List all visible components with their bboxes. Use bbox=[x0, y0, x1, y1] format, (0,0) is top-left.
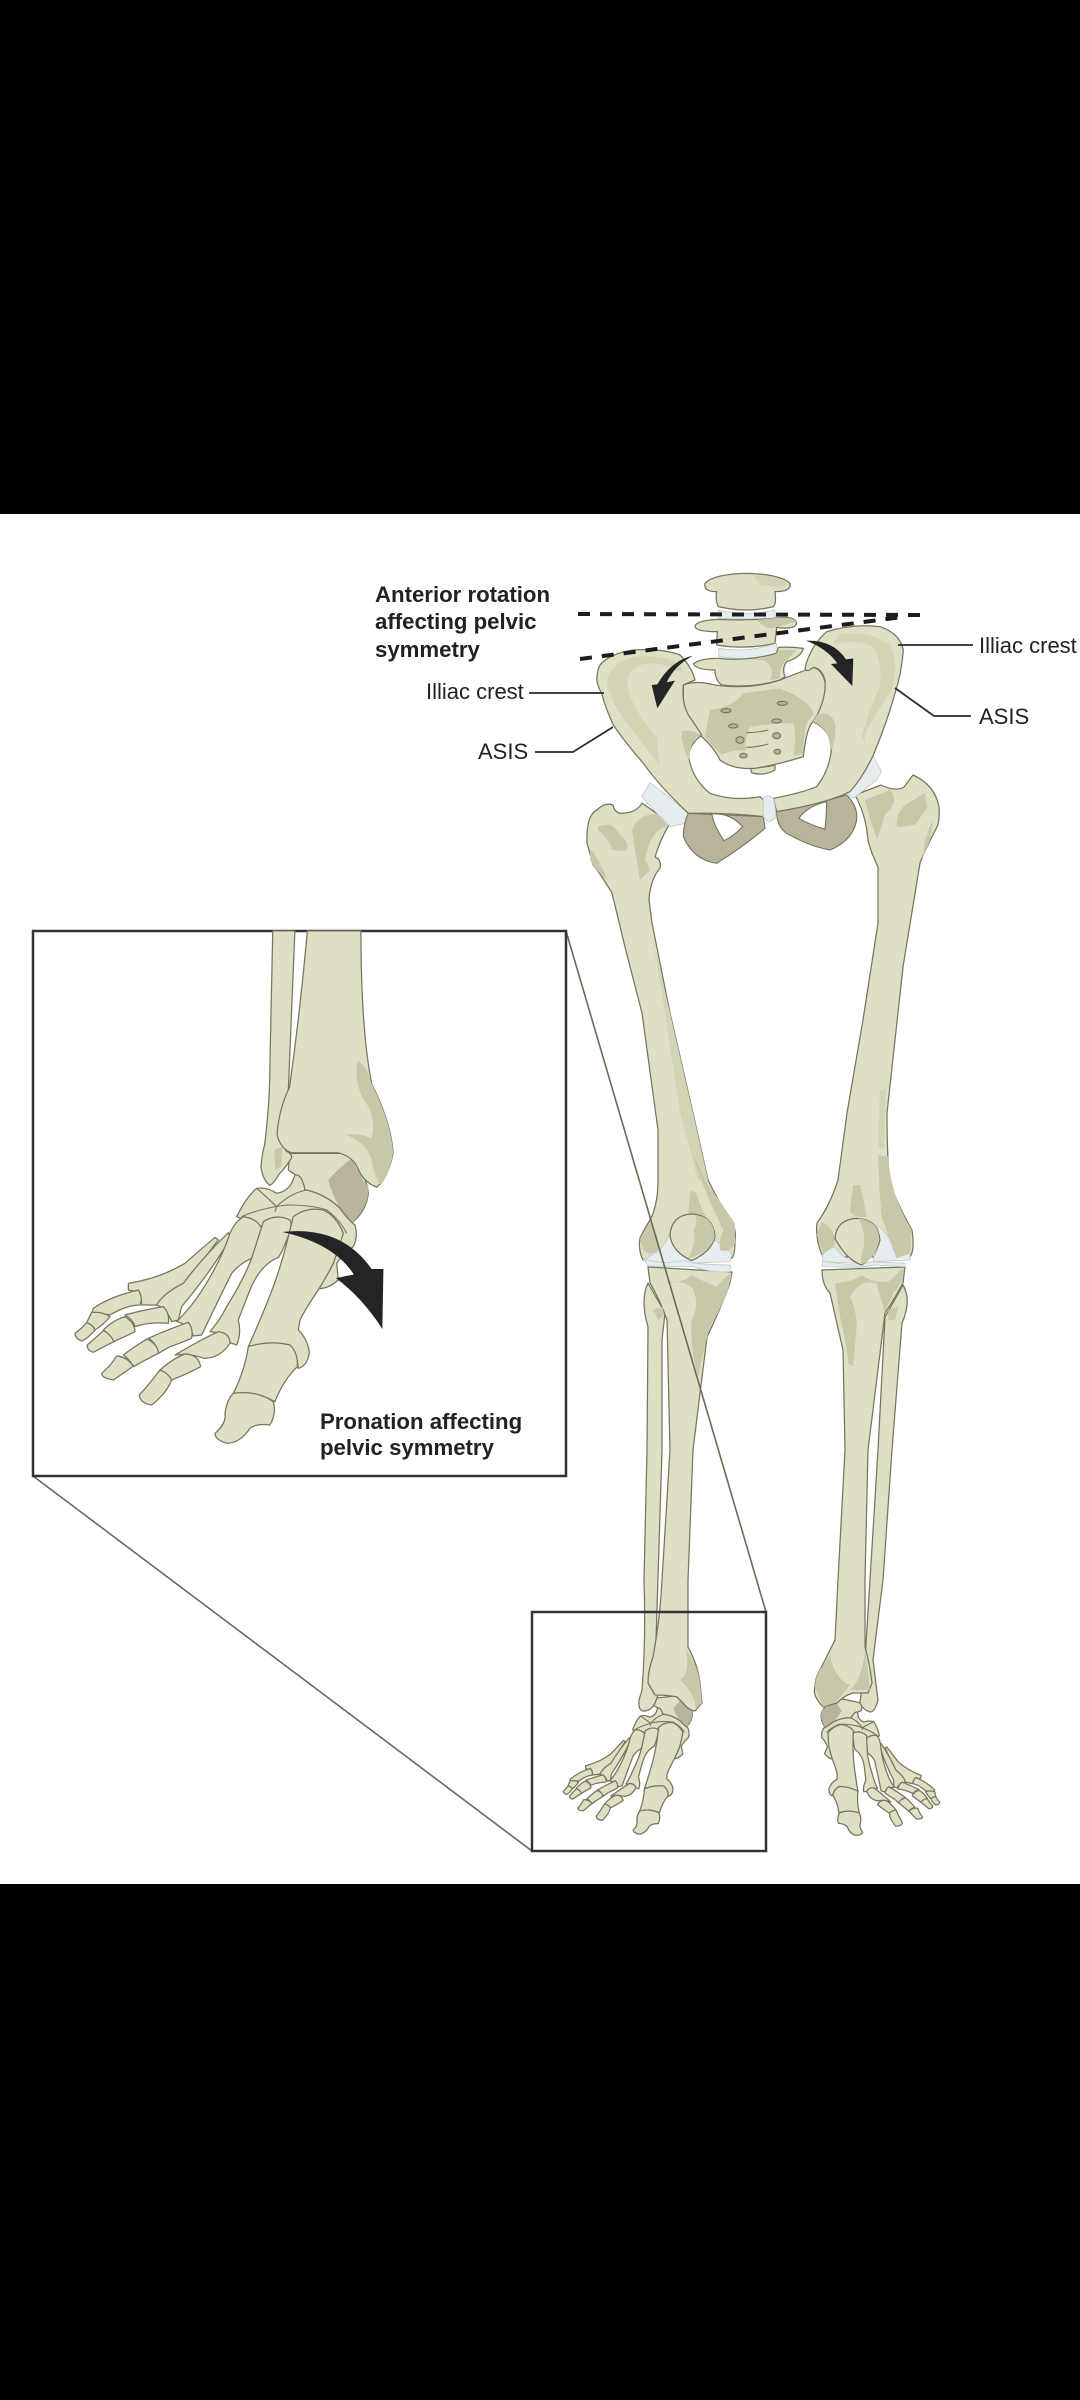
left foot bbox=[554, 1694, 705, 1842]
L4 vertebra bbox=[695, 617, 797, 647]
lower pubic bone right bbox=[777, 795, 857, 850]
label: illiac crest left: Illiac crest bbox=[426, 679, 524, 704]
lower pubic bone left bbox=[683, 813, 765, 863]
left iliac fossa shadow bbox=[682, 731, 700, 760]
inset tibia shading bbox=[345, 1062, 393, 1185]
label: illiac crest right: Illiac crest bbox=[979, 633, 1077, 658]
left tibia bbox=[648, 1267, 732, 1711]
left patella shade bbox=[688, 1215, 715, 1258]
leader lines bbox=[529, 645, 973, 752]
right femur condyle shade bbox=[817, 1155, 912, 1258]
label: ASIS right: ASIS bbox=[979, 704, 1029, 729]
lower disc bbox=[718, 643, 777, 659]
inset frame bbox=[33, 931, 566, 1476]
right foot bbox=[790, 1696, 962, 1850]
sacrum ridge lines bbox=[747, 730, 768, 747]
inset caption: pelvic symmetry bbox=[320, 1435, 495, 1460]
right ilium shading bbox=[833, 633, 895, 747]
right patella shade bbox=[858, 1218, 879, 1264]
L5 vertebra bbox=[693, 647, 803, 686]
small selection box around foot bbox=[532, 1612, 766, 1851]
left knee cartilage bbox=[643, 1235, 732, 1265]
coccyx bbox=[750, 765, 775, 774]
right patella bbox=[835, 1218, 880, 1265]
L3 vertebra bbox=[705, 573, 790, 610]
top black band bbox=[0, 0, 1080, 514]
left ilium shading bbox=[607, 656, 683, 767]
left femur bbox=[587, 803, 735, 1260]
L3 shading bbox=[753, 575, 788, 587]
inset foot bones bbox=[75, 1153, 368, 1443]
obturator foramen right bbox=[799, 802, 827, 829]
public symphysis bbox=[763, 796, 776, 821]
right ankle shading bbox=[815, 1650, 870, 1707]
femoral head cartilage left bbox=[642, 783, 688, 827]
dashed reference lines bbox=[578, 614, 923, 659]
left meniscus bbox=[643, 1258, 731, 1272]
obturator foramen left bbox=[712, 814, 743, 841]
right knee cartilage bbox=[822, 1225, 910, 1263]
right fibula bbox=[860, 1285, 907, 1712]
left femur head shading bbox=[590, 814, 668, 880]
femoral head cartilage right bbox=[847, 757, 882, 798]
L4 shading bbox=[757, 618, 796, 628]
inset panel: foot pronation bbox=[33, 931, 566, 1476]
heading: anterior rotation: affecting pelvic bbox=[375, 609, 537, 634]
white canvas bbox=[0, 514, 1080, 1884]
screen-right leg bones bbox=[790, 775, 962, 1850]
left patella bbox=[670, 1214, 715, 1261]
right meniscus bbox=[822, 1261, 905, 1267]
left rotation arrow bbox=[652, 656, 693, 708]
right femur bbox=[817, 775, 939, 1257]
pelvis and lumbar spine bbox=[597, 573, 903, 863]
left femur condyle shade bbox=[640, 1153, 735, 1258]
inset fibula bbox=[261, 931, 295, 1185]
sacrum shading bbox=[705, 688, 813, 757]
label: ASIS left: ASIS bbox=[478, 739, 528, 764]
right knee shading bbox=[817, 1155, 912, 1367]
right femur shaft shading bbox=[878, 1088, 886, 1148]
heading: anterior rotation: Anterior rotation bbox=[375, 582, 550, 607]
heading: anterior rotation: symmetry bbox=[375, 637, 480, 662]
sacrum bbox=[683, 667, 826, 769]
inset pronation arrow bbox=[282, 1231, 383, 1329]
inset fibula shading bbox=[274, 1147, 282, 1171]
zoom lines bbox=[33, 931, 766, 1851]
right iliac fossa shadow bbox=[813, 714, 836, 753]
inset tibia bbox=[277, 931, 393, 1187]
tilted pelvic line bbox=[580, 617, 902, 659]
left femur shaft shading bbox=[653, 940, 708, 1180]
bottom black band bbox=[0, 1884, 1080, 2400]
right fibula shade bbox=[888, 1307, 898, 1320]
upper disc bbox=[718, 610, 775, 619]
left knee shading bbox=[640, 1153, 735, 1377]
inset caption: Pronation affecting bbox=[320, 1409, 522, 1434]
rotation arrows on pelvis bbox=[652, 641, 853, 708]
right tibia plateau shade bbox=[835, 1268, 904, 1367]
right tibia bbox=[814, 1267, 905, 1707]
sacral foramina bbox=[721, 701, 787, 758]
right femur head shading bbox=[865, 790, 933, 860]
left fibula bbox=[639, 1283, 665, 1711]
right ilium bbox=[773, 626, 903, 812]
left ilium bbox=[597, 650, 767, 817]
left tibia plateau shade bbox=[665, 1273, 732, 1377]
horizontal level line bbox=[578, 614, 923, 615]
left fibula head shade bbox=[653, 1307, 664, 1320]
left ankle shading bbox=[680, 1650, 702, 1708]
screen-left leg bones bbox=[554, 803, 735, 1842]
inset shin and arrow bbox=[261, 931, 393, 1329]
L5 shading bbox=[750, 650, 797, 680]
right rotation arrow bbox=[806, 641, 853, 686]
